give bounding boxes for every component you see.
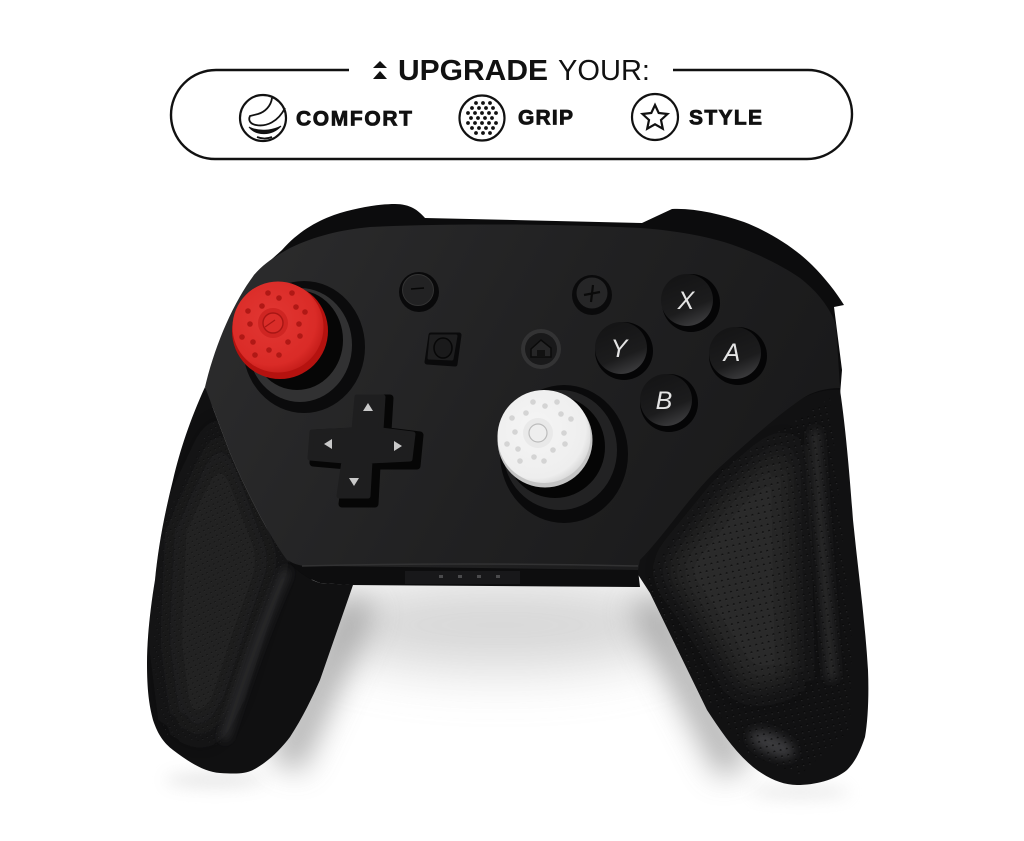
icon: upgrade arrows	[373, 61, 387, 79]
left grip ridge	[224, 570, 287, 740]
button A	[709, 327, 767, 385]
badge outline	[171, 70, 852, 159]
controller	[147, 204, 868, 785]
button A: A	[722, 339, 740, 367]
d-pad	[310, 397, 420, 504]
port contacts	[405, 571, 520, 584]
header badge	[171, 55, 852, 159]
bottom edge	[288, 560, 640, 587]
button Y	[595, 322, 653, 380]
right grip highlight	[748, 726, 796, 762]
floor shadow	[165, 580, 850, 798]
home button	[521, 329, 561, 369]
right grip texture	[645, 398, 852, 775]
button X: X	[677, 287, 696, 315]
left grip shaded panel	[165, 420, 275, 740]
label: comfort: COMFORT	[296, 108, 412, 130]
heading: your: YOUR:	[558, 55, 650, 87]
icon: style	[632, 94, 678, 140]
button Y: Y	[611, 335, 630, 363]
plus button	[572, 275, 612, 315]
button B: B	[656, 387, 672, 415]
button X	[661, 274, 720, 332]
heading: upgrade: UPGRADE	[398, 55, 548, 87]
capture button	[427, 335, 459, 364]
label: grip: GRIP	[518, 106, 573, 130]
minus button	[399, 272, 439, 312]
left thumbstick cap: red	[232, 282, 328, 379]
left grip	[147, 387, 353, 774]
left stick well	[243, 281, 365, 413]
icon: grip	[460, 96, 504, 140]
right thumbstick cap: white	[498, 390, 592, 488]
infographic canvas	[147, 60, 868, 800]
right grip	[637, 390, 868, 785]
left grip texture	[152, 400, 285, 745]
icon: comfort	[240, 95, 286, 141]
button B	[640, 374, 698, 432]
rear shell and shoulder bumpers	[205, 204, 844, 580]
right grip shaded panel	[665, 440, 795, 690]
main face	[205, 224, 840, 570]
right stick well	[500, 385, 628, 523]
label: style: STYLE	[689, 106, 762, 130]
bottom edge highlight	[302, 564, 638, 566]
right grip streak	[815, 430, 832, 680]
